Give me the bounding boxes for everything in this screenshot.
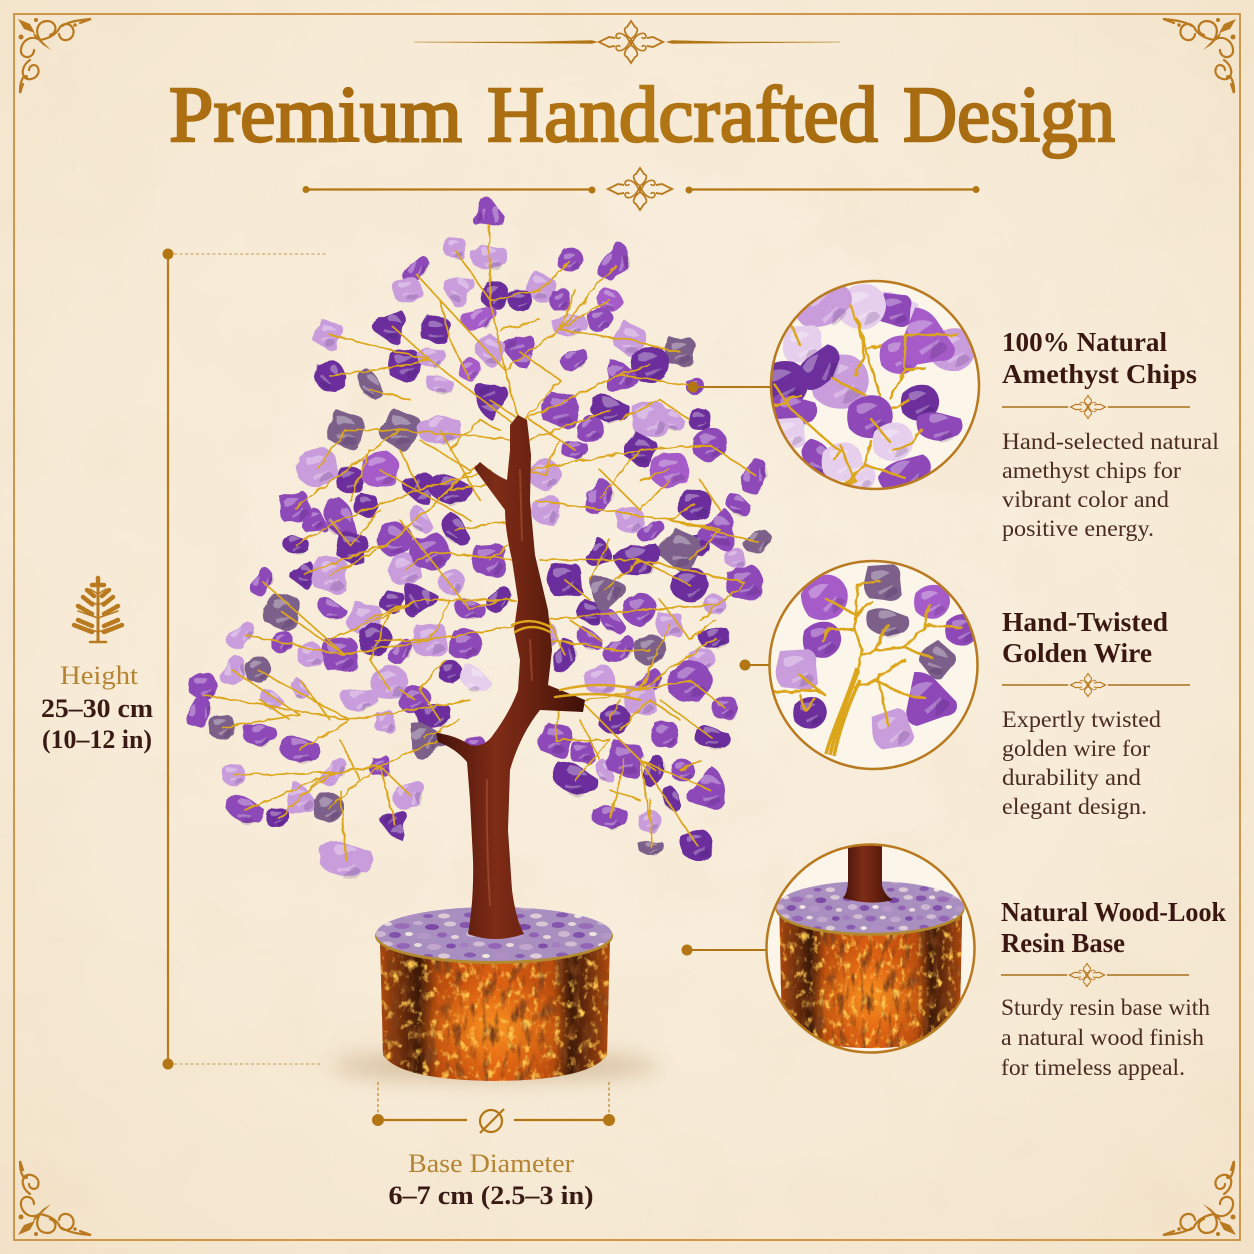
base diameter label bbox=[388, 1149, 594, 1210]
feature 2 description: Expertly twisted bbox=[1002, 707, 1162, 732]
corner ornament top left bbox=[18, 18, 91, 93]
base diameter label: Base Diameter bbox=[408, 1149, 574, 1178]
feature 1 heading bbox=[1002, 327, 1197, 389]
zoom circle: resin base bbox=[766, 844, 974, 1052]
trunk highlights bbox=[487, 470, 532, 905]
zoom circle: golden wire bbox=[770, 561, 979, 769]
top flourish divider bbox=[414, 21, 840, 63]
height label: 25–30 cm bbox=[41, 694, 153, 723]
feature 1 description: positive energy. bbox=[1002, 516, 1154, 541]
title: Handcrafted bbox=[487, 72, 878, 159]
feature 3 description: a natural wood finish bbox=[1001, 1025, 1205, 1050]
callout connector 2 bbox=[740, 660, 771, 670]
feature 3 description bbox=[1001, 995, 1211, 1080]
feature 3 text bbox=[1001, 897, 1226, 1080]
base diameter label: 6–7 cm (2.5–3 in) bbox=[388, 1181, 594, 1210]
feature 1 heading: 100% Natural bbox=[1002, 327, 1167, 357]
callout connector 1 bbox=[688, 382, 773, 392]
feature 1 description: amethyst chips for bbox=[1002, 458, 1181, 483]
base shadow bbox=[330, 1052, 660, 1080]
title: Design bbox=[903, 72, 1115, 159]
height label: (10–12 in) bbox=[42, 725, 152, 754]
icon: small tree bbox=[74, 578, 122, 642]
height label bbox=[41, 661, 153, 754]
feature 2 description: durability and bbox=[1002, 765, 1142, 790]
height label: Height bbox=[60, 661, 139, 690]
feature 3 heading bbox=[1001, 897, 1226, 958]
feature 3 heading: Resin Base bbox=[1001, 928, 1125, 958]
feature 2 text bbox=[1002, 607, 1190, 819]
feature 1 description: vibrant color and bbox=[1002, 487, 1170, 512]
feature 1 text bbox=[1002, 327, 1219, 541]
feature 3 description: Sturdy resin base with bbox=[1001, 995, 1211, 1020]
amethyst tree bbox=[184, 194, 775, 939]
feature 2 heading: Golden Wire bbox=[1002, 638, 1152, 668]
feature 2 description: golden wire for bbox=[1002, 736, 1150, 761]
trunk bbox=[436, 415, 585, 939]
feature 1 description bbox=[1002, 429, 1219, 541]
callout connector 3 bbox=[682, 944, 767, 956]
corner ornament top right bbox=[1163, 18, 1236, 93]
feature 1 description: Hand-selected natural bbox=[1002, 429, 1219, 454]
feature 3 heading: Natural Wood-Look bbox=[1001, 897, 1226, 927]
base diameter dimension bbox=[372, 1082, 615, 1133]
flourish divider below title bbox=[302, 168, 980, 210]
corner ornament bottom left bbox=[18, 1161, 91, 1236]
zoom circle: amethyst chips bbox=[758, 281, 979, 502]
golden wire branches bbox=[203, 225, 758, 860]
feature 2 heading: Hand-Twisted bbox=[1002, 607, 1168, 637]
corner ornament bottom right bbox=[1163, 1161, 1236, 1236]
feature 2 heading bbox=[1002, 607, 1168, 668]
feature 2 description bbox=[1002, 707, 1162, 819]
feature 1 divider bbox=[1002, 395, 1190, 419]
amethyst chips bbox=[184, 194, 775, 885]
title: Premium bbox=[169, 72, 462, 159]
height dimension line bbox=[162, 248, 328, 1070]
resin base bbox=[375, 907, 613, 1085]
wire wrap on trunk bbox=[512, 621, 640, 700]
feature 2 description: elegant design. bbox=[1002, 794, 1147, 819]
feature 3 divider bbox=[1001, 963, 1189, 987]
feature 3 description: for timeless appeal. bbox=[1001, 1055, 1185, 1080]
feature 2 divider bbox=[1002, 673, 1190, 697]
feature 1 heading: Amethyst Chips bbox=[1002, 359, 1197, 389]
